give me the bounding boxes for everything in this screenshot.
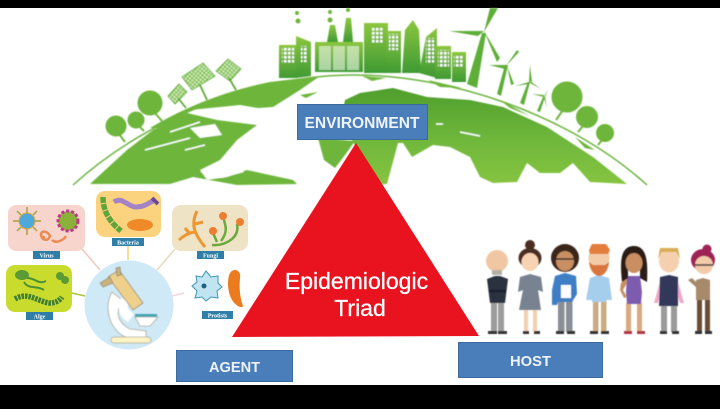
wind turbines bbox=[449, 8, 548, 112]
person 3: blue sweater with glasses bbox=[551, 244, 579, 334]
host label box bbox=[458, 342, 602, 378]
panel: protists bbox=[192, 270, 243, 320]
title: Epidemiologic Triad: Triad bbox=[334, 295, 386, 321]
continent: arctic band bbox=[150, 76, 320, 128]
microscope circle bbox=[84, 260, 174, 350]
panel: bacteria bbox=[96, 191, 161, 246]
title: Epidemiologic Triad: Epidemiologic bbox=[285, 268, 428, 294]
smoke puffs bbox=[295, 8, 350, 24]
panel: alge bbox=[6, 265, 72, 320]
panel: host people bbox=[486, 240, 715, 334]
label: virus: Virus bbox=[39, 254, 54, 260]
icon: microscope bbox=[100, 267, 158, 343]
solar panels bbox=[168, 59, 241, 108]
label: fungi: Fungi bbox=[203, 254, 218, 260]
person 7: woman with red hair bbox=[688, 244, 715, 334]
factory and city buildings bbox=[279, 18, 466, 82]
bottom black bar bbox=[0, 385, 720, 409]
trees left bbox=[106, 91, 162, 142]
continent: north america bbox=[90, 113, 297, 185]
agent label box: AGENT bbox=[209, 359, 260, 376]
panel: environment globe illustration bbox=[73, 8, 647, 185]
continent: eurasia and africa bbox=[340, 88, 627, 184]
host label box: HOST bbox=[510, 353, 551, 370]
trees right bbox=[552, 82, 614, 145]
connector lines bbox=[72, 246, 184, 296]
label: protists: Protists bbox=[208, 314, 228, 320]
agent label box bbox=[176, 350, 292, 382]
person 2: woman in gray bbox=[518, 240, 543, 334]
globe horizon arc bbox=[73, 75, 647, 185]
label: bacteria: Bacteria bbox=[117, 240, 139, 246]
red triangle with title bbox=[232, 143, 479, 337]
continent: south america bbox=[318, 138, 355, 168]
person 4: ginger man bbox=[586, 244, 612, 334]
person 1: bald man bbox=[486, 250, 508, 334]
islands along the horizon bbox=[300, 76, 595, 150]
building windows bbox=[282, 28, 464, 68]
panel: fungi bbox=[172, 205, 248, 260]
environment label box bbox=[298, 104, 428, 140]
white surface details bbox=[145, 122, 480, 150]
panel: virus bbox=[8, 205, 85, 260]
top black bar bbox=[0, 0, 720, 8]
factory windows bbox=[319, 46, 359, 70]
label: alge: Alge bbox=[34, 314, 46, 320]
environment label box: ENVIRONMENT bbox=[304, 115, 420, 132]
person 5: woman in purple bbox=[620, 246, 647, 334]
person 6: blonde man with vest bbox=[654, 248, 684, 334]
panel: agent microbes bbox=[6, 191, 248, 350]
